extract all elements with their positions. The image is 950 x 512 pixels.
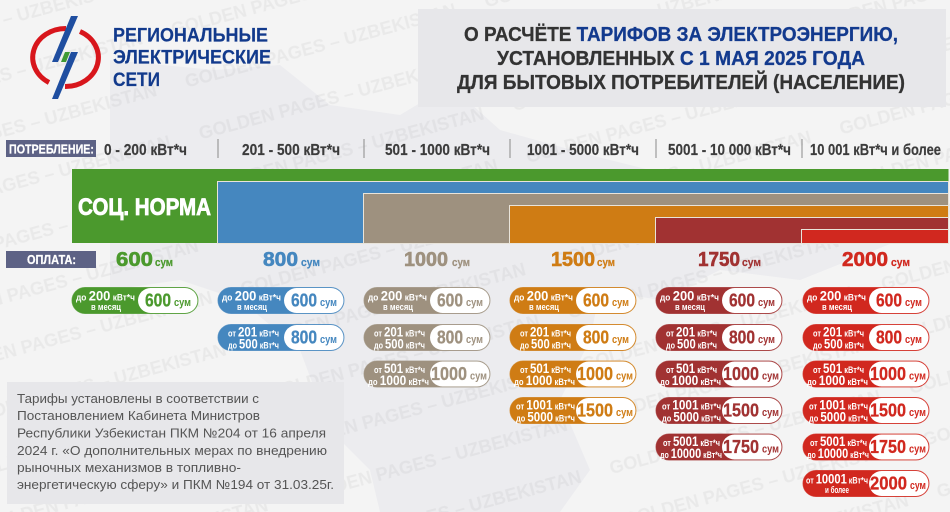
pill: 501-1000: от 501 кВт*ч [813, 360, 864, 376]
legal note panel: Постановлением Кабинета Министров [17, 408, 260, 423]
pill: 1001-5000 [510, 396, 636, 424]
column: 600 tariff [72, 288, 198, 314]
logo [33, 16, 271, 99]
price: 800 [263, 249, 320, 271]
pill: up to 200: 600 [145, 290, 171, 310]
pill: 501-1000: сум [909, 370, 926, 382]
pill: up to 200: до 200 кВт*ч [222, 288, 281, 304]
pill: 5001-10000 [656, 433, 782, 461]
pill: 1001-5000: от 1001 кВт*ч [809, 396, 868, 412]
column: 2000 tariff [803, 288, 929, 496]
pill: 501-1000: от 501 кВт*ч [666, 360, 717, 376]
pill: up to 200: до 200 кВт*ч [514, 288, 573, 304]
pill: 501-1000 [364, 360, 490, 388]
pill: 201-500: от 201 кВт*ч [813, 324, 864, 340]
pill: 201-500 [218, 324, 344, 352]
pill: 1001-5000: 1500 [577, 400, 613, 420]
label: payment: ОПЛАТА: [27, 253, 76, 267]
pill: 501-1000: до 1000 кВт*ч [514, 372, 575, 388]
price: 1000 [404, 249, 470, 271]
price: 1500: 1500 [551, 249, 595, 271]
icon: lightning bolt [52, 16, 78, 99]
pill: up to 200: 600 [876, 290, 902, 310]
consumption ranges: 0 - 200 кВт*ч [104, 142, 187, 159]
pill: 501-1000: сум [762, 370, 779, 382]
pill: 201-500 [803, 324, 929, 352]
legal note panel: энергетическую сферу» и ПКМ №194 от 31.03.25г. [17, 477, 334, 492]
pill: 10001 and more: от 10001 кВт*ч [806, 470, 868, 486]
pill: 201-500: от 201 кВт*ч [520, 324, 571, 340]
pill: 501-1000 [510, 360, 636, 388]
pill: up to 200 [803, 288, 929, 314]
pill: 201-500: сум [466, 334, 483, 346]
pill: up to 200: в месяц [237, 302, 267, 312]
pill: 501-1000: 1000 [431, 363, 467, 384]
column: 800 tariff [218, 288, 344, 352]
pill: up to 200: сум [320, 297, 337, 309]
pill: 1001-5000: сум [909, 407, 926, 419]
pill: 501-1000 [656, 360, 782, 388]
title panel: О РАСЧЁТЕ ТАРИФОВ ЗА ЭЛЕКТРОЭНЕРГИЮ, [464, 23, 898, 46]
price: 1000: сум [452, 257, 470, 269]
legal note panel: Республики Узбекистан ПКМ №204 от 16 апреля [17, 426, 326, 440]
pill: up to 200 [656, 288, 782, 314]
title panel [418, 9, 946, 107]
pill: 201-500: сум [905, 334, 922, 346]
payment row [6, 249, 910, 271]
pill: 201-500: от 201 кВт*ч [374, 324, 425, 340]
pill: 501-1000: до 1000 кВт*ч [807, 372, 868, 388]
pill: up to 200: сум [466, 297, 483, 309]
pill: 5001-10000: до 10000 кВт*ч [807, 445, 869, 461]
price: 1000: 1000 [404, 249, 448, 271]
pill: 501-1000: 1000 [577, 363, 613, 384]
consumption ranges [104, 139, 941, 159]
consumption ranges: 1001 - 5000 кВт*ч [527, 142, 639, 159]
pill: 5001-10000: до 10000 кВт*ч [660, 445, 722, 461]
price: 2000: 2000 [842, 249, 888, 271]
pill: 201-500: сум [612, 334, 629, 346]
price: 1500 [551, 249, 615, 271]
company name [113, 24, 271, 91]
pill: up to 200: сум [905, 297, 922, 309]
price: 600: сум [155, 257, 173, 269]
pill: 1001-5000 [803, 396, 929, 424]
pill: 1001-5000: до 5000 кВт*ч [662, 408, 721, 424]
pill: 501-1000: от 501 кВт*ч [520, 360, 571, 376]
pill: 1001-5000: от 1001 кВт*ч [516, 396, 575, 412]
pill: up to 200: 600 [729, 290, 755, 310]
pill: up to 200: в месяц [383, 302, 413, 312]
column: 1750 tariff [656, 288, 782, 461]
pill: 5001-10000: от 5001 кВт*ч [810, 433, 867, 449]
pill: 1001-5000: до 5000 кВт*ч [516, 408, 575, 424]
pill: 501-1000: до 1000 кВт*ч [660, 372, 721, 388]
pill: 10001 and more: сум [910, 480, 926, 492]
price: 600 [116, 249, 173, 271]
pill: up to 200: в месяц [675, 302, 705, 312]
pill: up to 200: в месяц [91, 302, 121, 312]
price: 1750: сум [742, 257, 761, 269]
pill: 1001-5000: 1500 [870, 400, 906, 420]
pill: 201-500: сум [320, 334, 337, 346]
pill: up to 200 [364, 288, 490, 314]
consumption ranges: 501 - 1000 кВт*ч [385, 142, 490, 159]
column: 1500 tariff [510, 288, 636, 424]
pill: up to 200 [72, 288, 198, 314]
label: payment [6, 251, 96, 268]
social norm label: СОЦ. НОРМА [78, 194, 211, 221]
pill: 201-500: 800 [583, 326, 609, 348]
pill: 5001-10000: от 5001 кВт*ч [663, 433, 720, 449]
legal note panel: Тарифы установлены в соответствии с [17, 391, 260, 406]
legal note panel [7, 382, 344, 504]
pill: 201-500: до 500 кВт*ч [228, 336, 279, 352]
pill: 10001 and more: 2000 [870, 472, 907, 494]
pill: 5001-10000: сум [762, 444, 779, 456]
pill: up to 200 [218, 288, 344, 314]
pill: 1001-5000 [656, 396, 782, 424]
company name: ЭЛЕКТРИЧЕСКИЕ [113, 46, 271, 68]
pill: up to 200: до 200 кВт*ч [660, 288, 719, 304]
pill: 201-500: от 201 кВт*ч [228, 324, 279, 340]
pill: 1001-5000: сум [616, 407, 633, 419]
pill: 5001-10000 [803, 433, 929, 461]
pill: 201-500: до 500 кВт*ч [666, 336, 717, 352]
pill: up to 200: 600 [583, 290, 609, 310]
pill: 1001-5000: сум [762, 407, 779, 419]
pill: 501-1000: 1000 [723, 363, 759, 384]
company name: РЕГИОНАЛЬНЫЕ [113, 24, 268, 46]
pill: 10001 and more: и более [825, 485, 849, 495]
consumption row [6, 139, 941, 159]
icon: red ring [33, 28, 98, 87]
price: 800: 800 [263, 249, 298, 271]
pill: up to 200: до 200 кВт*ч [807, 288, 866, 304]
pill: up to 200: сум [174, 297, 191, 309]
pill: up to 200: сум [612, 297, 629, 309]
pill: up to 200: до 200 кВт*ч [76, 288, 135, 304]
company name: СЕТИ [113, 69, 160, 91]
pill: 201-500 [364, 324, 490, 352]
legal note panel: рыночных механизмов в топливно- [17, 460, 241, 475]
pill: 501-1000: сум [616, 370, 633, 382]
pill: up to 200: 600 [291, 290, 317, 310]
pill: 201-500: 800 [291, 326, 317, 348]
pill: 201-500 [656, 324, 782, 352]
pill: 201-500: от 201 кВт*ч [666, 324, 717, 340]
pill: 501-1000: 1000 [870, 363, 906, 384]
stepped tariff bars [72, 169, 948, 244]
pill: 501-1000: от 501 кВт*ч [374, 360, 425, 376]
pill: 501-1000 [803, 360, 929, 388]
pill: up to 200 [510, 288, 636, 314]
pill: 201-500: 800 [729, 326, 755, 348]
legal note panel: 2024 г. «О дополнительных мерах по внедрению [17, 443, 327, 458]
price: 2000: сум [891, 257, 910, 269]
price: 800: сум [301, 257, 320, 269]
title panel: УСТАНОВЛЕННЫХ С 1 МАЯ 2025 ГОДА [497, 48, 865, 70]
label: consumption: ПОТРЕБЛЕНИЕ: [9, 142, 94, 156]
title panel: ДЛЯ БЫТОВЫХ ПОТРЕБИТЕЛЕЙ (НАСЕЛЕНИЕ) [457, 70, 905, 94]
pill: 5001-10000: 1750 [723, 436, 759, 457]
pill: up to 200: в месяц [822, 302, 852, 312]
pill: 201-500: до 500 кВт*ч [813, 336, 864, 352]
pill: 201-500: до 500 кВт*ч [374, 336, 425, 352]
pill: 5001-10000: 1750 [870, 436, 906, 457]
pill: 5001-10000: сум [909, 444, 926, 456]
price: 600: 600 [116, 249, 153, 271]
pill: 1001-5000: от 1001 кВт*ч [662, 396, 721, 412]
pill: 1001-5000: 1500 [723, 400, 759, 420]
price: 2000 [842, 249, 910, 271]
price: 1500: сум [597, 257, 615, 269]
column: 1000 tariff [364, 288, 490, 388]
price: 1750: 1750 [698, 249, 740, 271]
consumption ranges: 5001 - 10 000 кВт*ч [668, 142, 791, 159]
pill: 201-500: 800 [876, 326, 902, 348]
pill: up to 200: в месяц [529, 302, 559, 312]
pill: up to 200: до 200 кВт*ч [368, 288, 427, 304]
pill: 201-500: сум [758, 334, 775, 346]
pill: 501-1000: до 1000 кВт*ч [368, 372, 429, 388]
pill: 201-500 [510, 324, 636, 352]
pill: 201-500: 800 [437, 326, 463, 348]
pill: up to 200: 600 [437, 290, 463, 310]
pill: 10001 and more [803, 470, 929, 496]
consumption ranges: 201 - 500 кВт*ч [242, 142, 340, 159]
pill: 201-500: до 500 кВт*ч [520, 336, 571, 352]
pill: 501-1000: сум [470, 370, 487, 382]
pill: 1001-5000: до 5000 кВт*ч [809, 408, 868, 424]
pill: up to 200: сум [758, 297, 775, 309]
